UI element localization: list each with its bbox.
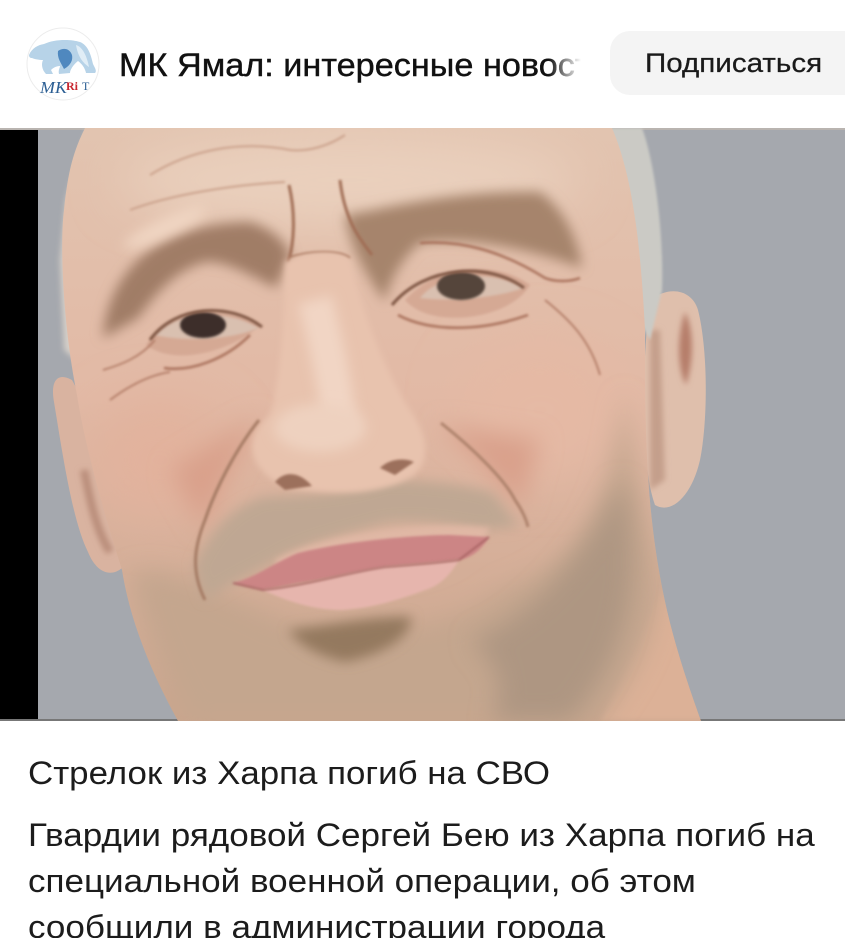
stubble on jaw bbox=[138, 424, 660, 715]
lips bbox=[276, 525, 488, 562]
nose bbox=[252, 253, 425, 492]
eyes bbox=[146, 314, 259, 356]
left ear bbox=[53, 377, 122, 573]
logo wordmark: MK bbox=[39, 78, 69, 97]
eye creases bbox=[103, 242, 600, 400]
headline: Стрелок из Харпа погиб на СВО bbox=[28, 755, 550, 791]
icon: polar bear channel logo: T bbox=[82, 79, 90, 93]
grey hair bbox=[604, 128, 662, 340]
head and skin shading bbox=[40, 128, 720, 721]
nostrils bbox=[275, 474, 312, 490]
icon: polar bear channel logo: Ri bbox=[66, 79, 79, 93]
article text: специальной военной операции, об этом bbox=[28, 863, 696, 899]
cheeks bbox=[90, 400, 230, 520]
forehead furrows bbox=[130, 135, 372, 262]
chin patch bbox=[288, 617, 412, 662]
header bar bbox=[26, 28, 845, 100]
background bbox=[38, 128, 845, 721]
smile creases bbox=[196, 420, 259, 600]
icon: polar bear channel logo bbox=[26, 28, 100, 100]
photo: smiling man's face bbox=[0, 128, 845, 721]
article text bbox=[28, 817, 815, 938]
stubble around mouth bbox=[194, 480, 519, 600]
article text: Гвардии рядовой Сергей Бею из Харпа погиб на bbox=[28, 817, 815, 853]
subscribe button bbox=[610, 31, 845, 95]
neck bbox=[604, 598, 701, 721]
subscribe button: Подписаться bbox=[645, 48, 822, 78]
eyebrows and brow shadow bbox=[103, 222, 290, 338]
right ear bbox=[644, 291, 706, 508]
